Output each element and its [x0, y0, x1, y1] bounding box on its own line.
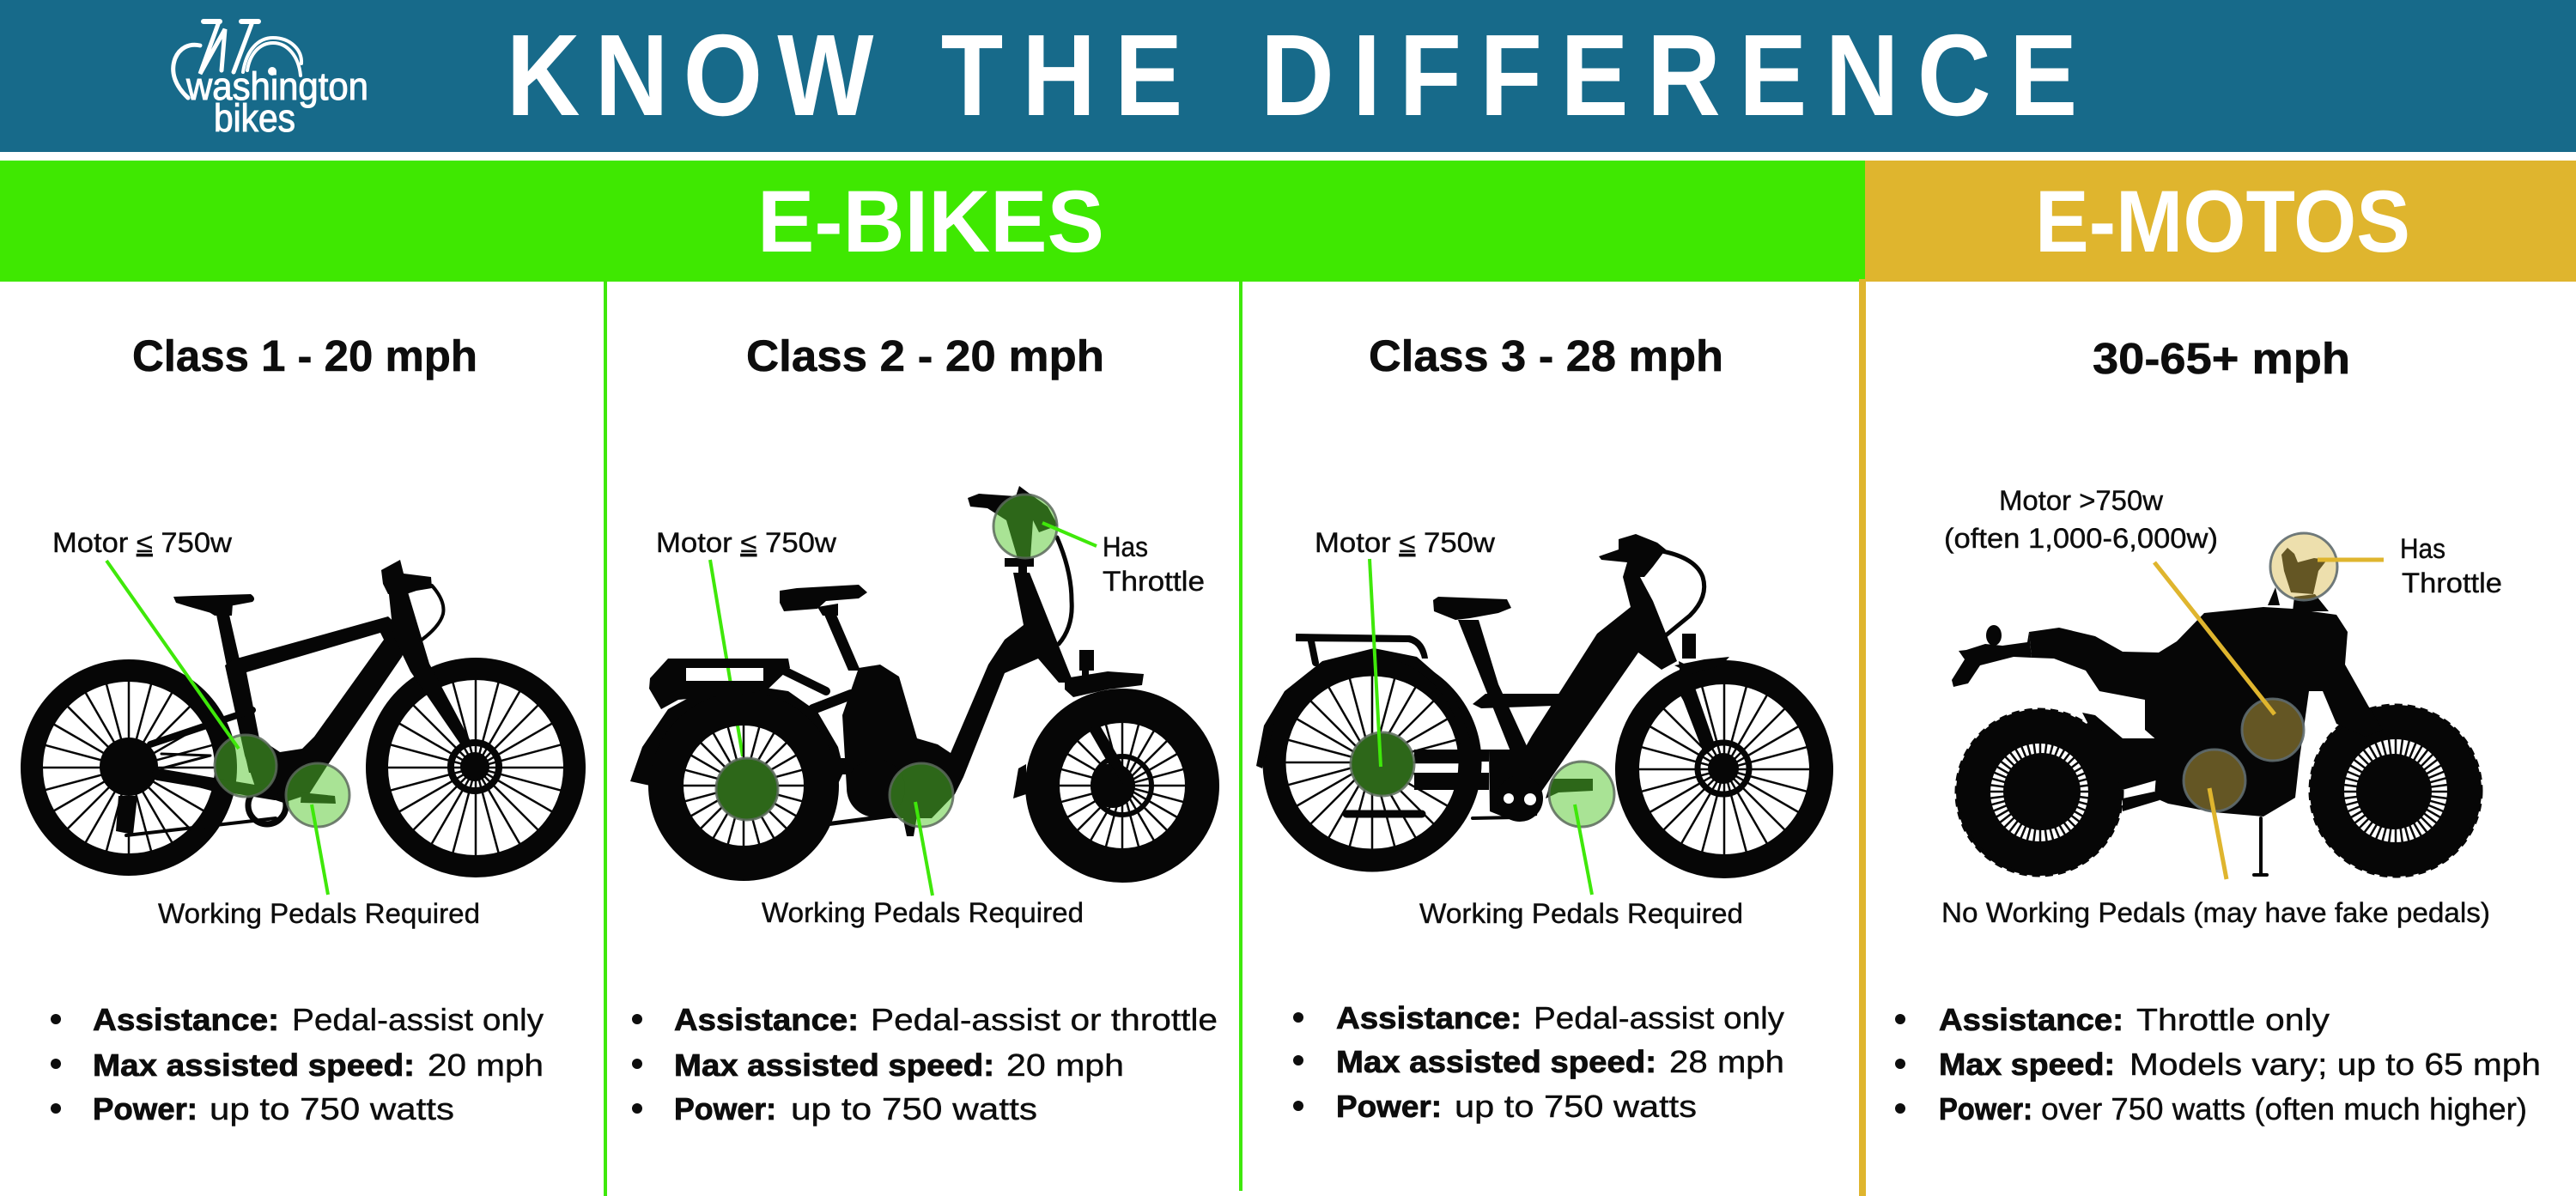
- label: motor: Motor ≤ 750w: [1315, 527, 1496, 558]
- logo: washington bikes: washington: [185, 64, 368, 108]
- spec list: class 3: Max assisted speed:: [1336, 1044, 1656, 1079]
- heading: class 3: Class 3 - 28 mph: [1369, 331, 1723, 380]
- heading: class 1: Class 1 - 20 mph: [132, 331, 477, 380]
- e-motos banner: [1865, 161, 2576, 282]
- spec list: class 2: 20 mph: [1006, 1047, 1124, 1083]
- callout circle: pedal: [286, 763, 349, 827]
- header banner: [0, 0, 2576, 152]
- spec list: e-motos: Max speed:: [1939, 1047, 2115, 1082]
- spec list: class 1: Pedal-assist only: [292, 1002, 544, 1037]
- spec list: e-motos: Assistance:: [1939, 1002, 2123, 1037]
- panel: e-motos: [1895, 334, 2541, 1126]
- leader: motor: [2154, 562, 2275, 714]
- callout circle: pedal: [890, 763, 953, 827]
- spec list: class 2: Power:: [674, 1091, 776, 1126]
- bike silhouette: class 1: [32, 560, 574, 866]
- spec list: class 1: 20 mph: [428, 1047, 544, 1083]
- panel: class 1: [32, 331, 574, 1126]
- spec list: e-motos: Throttle only: [2136, 1002, 2330, 1037]
- bike silhouette: class 3: [1256, 534, 1821, 866]
- label: motor: Motor ≤ 750w: [656, 527, 837, 558]
- spec list: class 2: [632, 1002, 1218, 1126]
- bike silhouette: class 2: [630, 486, 1202, 865]
- leader: motor: [1370, 559, 1381, 767]
- e-motos banner: E-MOTOS: [2035, 173, 2410, 270]
- spec list: class 2: Pedal-assist or throttle: [871, 1002, 1218, 1037]
- label: has throttle: Throttle: [2402, 568, 2502, 598]
- spec list: e-motos: Models vary; up to 65 mph: [2129, 1047, 2541, 1082]
- spec list: class 3: Pedal-assist only: [1534, 1000, 1784, 1035]
- label: pedals: Working Pedals Required: [1419, 898, 1743, 929]
- leader: throttle: [1042, 523, 1097, 546]
- spec list: e-motos: [1895, 1002, 2541, 1126]
- spec list: class 1: [51, 1002, 544, 1126]
- leader: throttle: [2318, 558, 2384, 562]
- panel: class 2: [630, 331, 1218, 1126]
- label: has throttle: [1103, 531, 1205, 597]
- callout circle: pedal: [1549, 762, 1614, 827]
- spec list: class 3: up to 750 watts: [1455, 1089, 1697, 1124]
- label: motor: Motor ≤ 750w: [52, 527, 233, 558]
- spec list: class 1: Max assisted speed:: [93, 1047, 415, 1083]
- callout circle: pedal area: [2184, 750, 2245, 811]
- spec list: class 1: Power:: [93, 1091, 197, 1126]
- label: pedals: Working Pedals Required: [158, 898, 480, 929]
- leader: pedal: [915, 802, 933, 895]
- heading: e-moto speed: 30-65+ mph: [2093, 334, 2350, 383]
- spec list: class 1: up to 750 watts: [210, 1091, 454, 1126]
- e-bikes banner: [0, 161, 1865, 282]
- label: motor: [1944, 485, 2218, 554]
- spec list: e-motos: over 750 watts (often much higher): [2041, 1091, 2527, 1126]
- spec list: class 3: Assistance:: [1336, 1000, 1522, 1035]
- label: has throttle: Has: [1103, 531, 1148, 562]
- spec list: class 1: Assistance:: [93, 1002, 279, 1037]
- logo: washington bikes: bikes: [214, 96, 295, 140]
- label: motor: Motor >750w: [1999, 485, 2164, 516]
- callout circle: throttle: [993, 495, 1057, 558]
- e-bikes banner: E-BIKES: [757, 173, 1104, 270]
- leader: motor: [710, 560, 743, 756]
- callout circle: motor: [1351, 732, 1414, 796]
- leader: pedal area: [2209, 788, 2227, 879]
- label: has throttle: [2400, 533, 2502, 598]
- callout circle: motor: [716, 758, 778, 820]
- heading: class 2: Class 2 - 20 mph: [746, 331, 1104, 380]
- leader: pedal: [1575, 804, 1592, 895]
- spec list: class 2: Assistance:: [674, 1002, 859, 1037]
- callout circle: motor: [215, 735, 276, 797]
- label: no working pedals: No Working Pedals (may have fake pedals): [1941, 897, 2490, 928]
- spec list: class 3: Power:: [1336, 1089, 1442, 1124]
- label: has throttle: Has: [2400, 533, 2445, 564]
- panel: class 3: [1256, 331, 1821, 1124]
- callout circle: motor: [2242, 699, 2304, 761]
- leader: motor: [106, 561, 239, 749]
- title: THE: [941, 10, 1182, 140]
- spec list: e-motos: Power:: [1939, 1091, 2032, 1126]
- title: KNOW: [507, 10, 873, 140]
- spec list: class 2: up to 750 watts: [791, 1091, 1037, 1126]
- title: DIFFERENCE: [1261, 10, 2077, 140]
- spec list: class 2: Max assisted speed:: [674, 1047, 994, 1083]
- spec list: class 3: 28 mph: [1669, 1044, 1784, 1079]
- label: pedals: Working Pedals Required: [762, 897, 1084, 928]
- logo: washington bikes: [173, 21, 368, 140]
- label: motor: (often 1,000-6,000w): [1944, 523, 2218, 554]
- callout circle: throttle: [2270, 533, 2337, 600]
- spec list: class 3: [1293, 1000, 1784, 1124]
- motorcycle silhouette: [1952, 548, 2481, 876]
- label: has throttle: Throttle: [1103, 566, 1205, 597]
- leader: pedal: [312, 804, 328, 895]
